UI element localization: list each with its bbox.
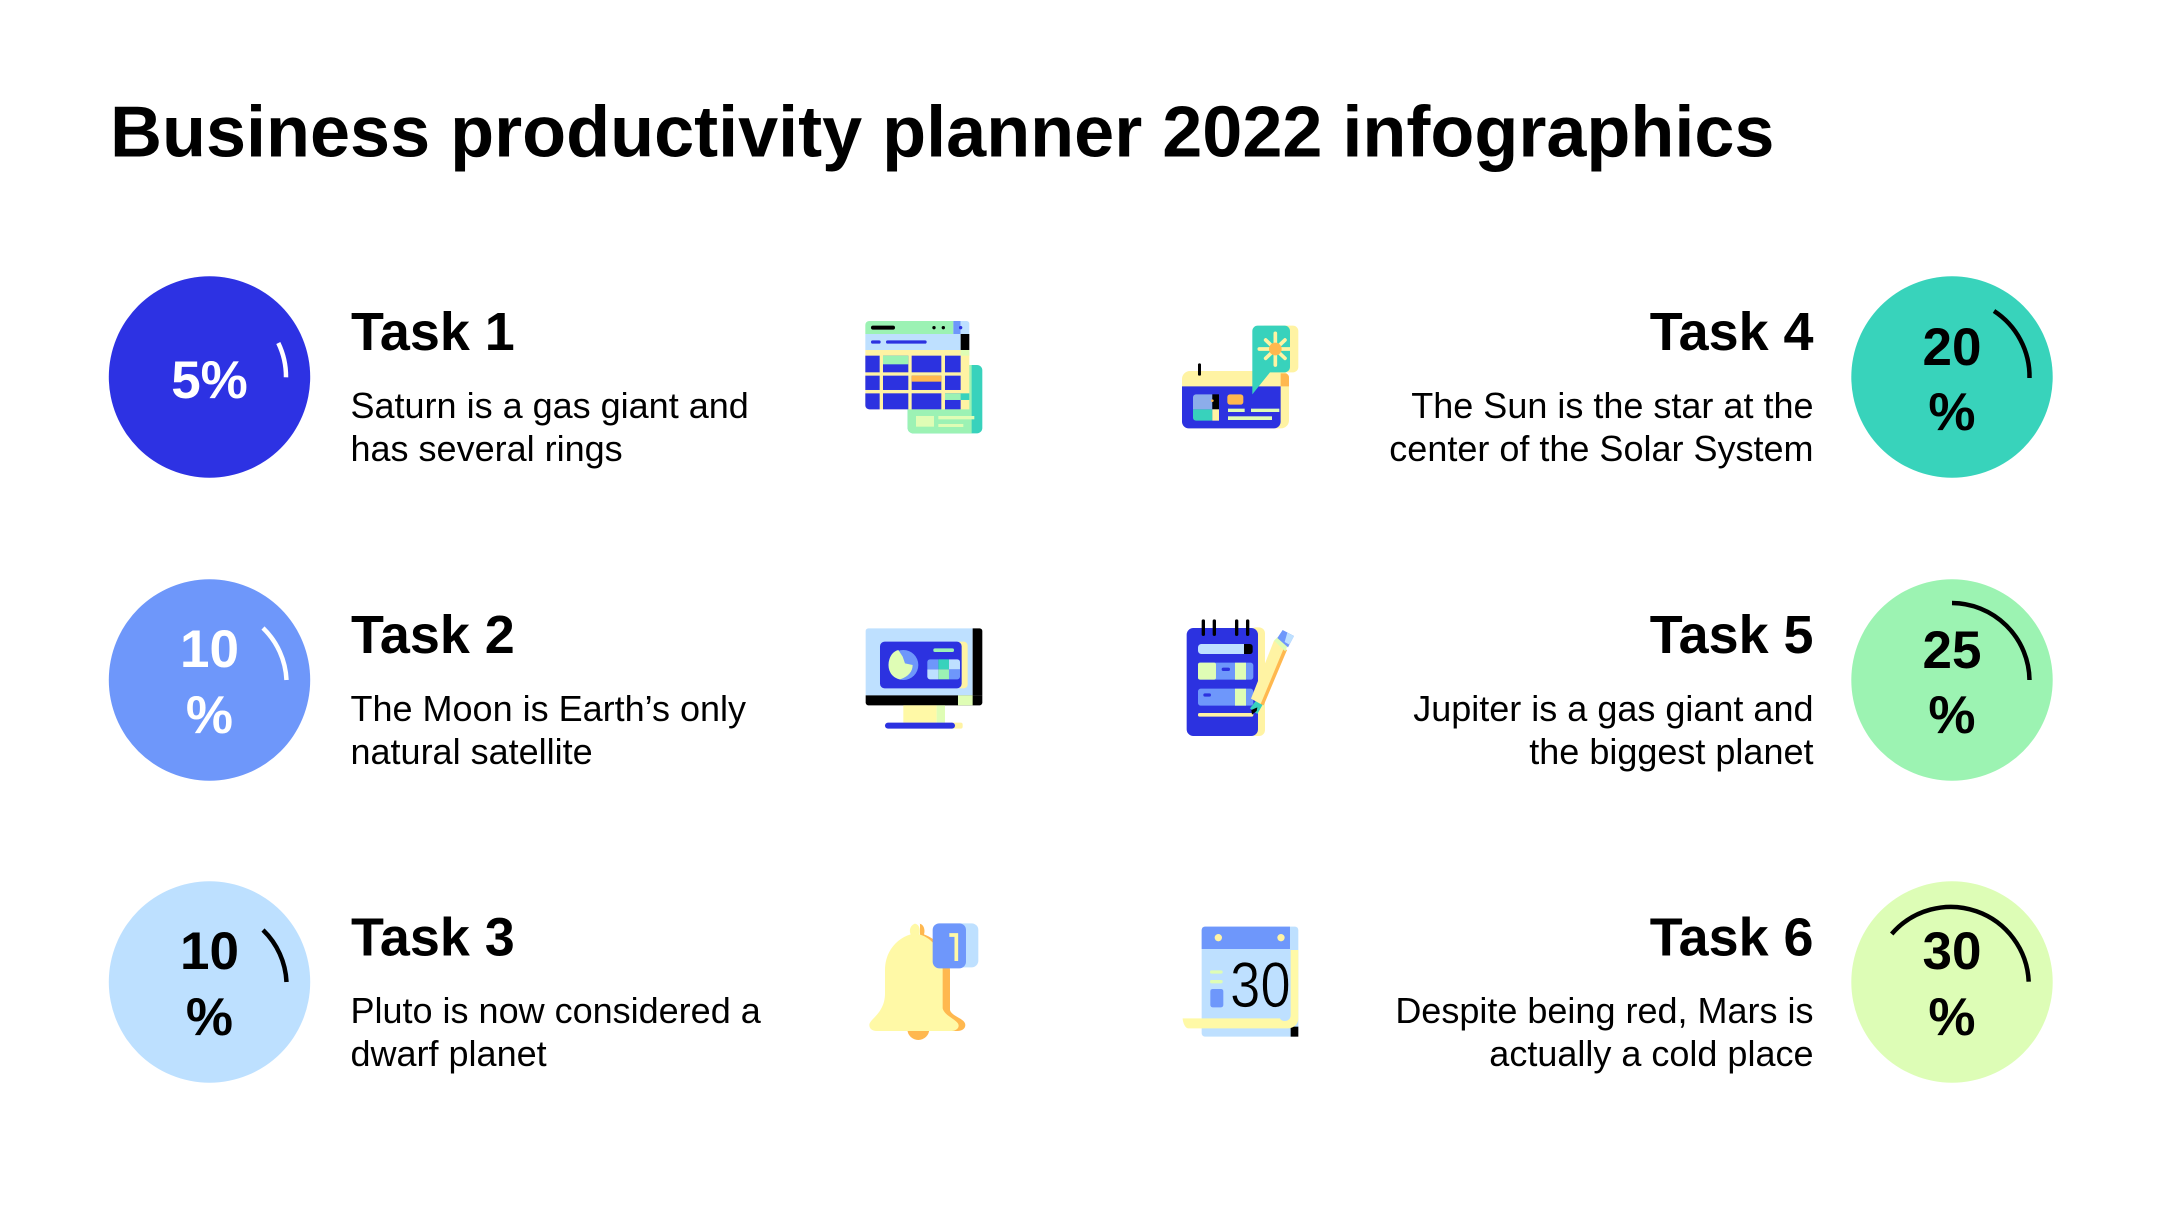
progress circle: 30%: 30 xyxy=(1923,922,1981,981)
icon: planner window xyxy=(865,321,982,433)
title: Business productivity planner 2022 infographics xyxy=(110,92,1774,172)
task 2 description: natural satellite xyxy=(350,731,593,772)
task 2 description: The Moon is Earth’s only xyxy=(350,688,746,729)
task 5 description: Jupiter is a gas giant and xyxy=(1413,688,1814,729)
progress circle: 25%: % xyxy=(1928,686,1976,745)
icon: desktop monitor xyxy=(866,628,982,729)
panel: task 6 xyxy=(1183,881,2053,1083)
progress circle: 25% xyxy=(1851,579,2053,781)
task 4 heading: Task 4 xyxy=(1650,302,1814,362)
progress circle: 10%: % xyxy=(186,988,233,1047)
task 1 description: Saturn is a gas giant and xyxy=(350,385,749,426)
progress circle: 10%: 10 xyxy=(180,620,239,679)
panel: task 5 xyxy=(1187,579,2053,781)
panel: task 1 xyxy=(109,276,982,478)
progress circle: 20%: 20 xyxy=(1923,318,1981,377)
icon: notification bell xyxy=(869,923,978,1040)
task 6 description: actually a cold place xyxy=(1489,1033,1814,1074)
task 3 description: dwarf planet xyxy=(350,1033,547,1074)
progress circle: 10%: 10 xyxy=(180,922,239,981)
task 4 description: The Sun is the star at the xyxy=(1411,385,1814,426)
task 1 description: has several rings xyxy=(350,428,623,469)
progress circle: 10% xyxy=(109,881,310,1083)
task 4 description: center of the Solar System xyxy=(1389,428,1814,469)
panel: task 4 xyxy=(1182,276,2053,478)
panel: task 3 xyxy=(109,881,978,1083)
progress circle: 25%: 25 xyxy=(1923,621,1981,680)
panel: task 2 xyxy=(109,579,982,781)
task 6 description: Despite being red, Mars is xyxy=(1395,990,1814,1031)
task 5 heading: Task 5 xyxy=(1650,605,1814,665)
progress circle: 5%: 5% xyxy=(171,351,248,410)
icon: wall calendar showing 30: 30 xyxy=(1230,949,1291,1021)
icon: notepad and pencil xyxy=(1187,619,1294,736)
task 6 heading: Task 6 xyxy=(1650,908,1814,968)
progress circle: 20% xyxy=(1851,276,2053,478)
task 3 heading: Task 3 xyxy=(351,908,515,968)
progress circle: 5% xyxy=(109,276,310,478)
task 1 heading: Task 1 xyxy=(351,302,515,362)
progress circle: 30% xyxy=(1851,881,2053,1083)
task 5 description: the biggest planet xyxy=(1529,731,1814,772)
task 2 heading: Task 2 xyxy=(351,605,515,665)
progress circle: 30%: % xyxy=(1928,988,1976,1047)
task 3 description: Pluto is now considered a xyxy=(350,990,762,1031)
icon: wall calendar showing 30 xyxy=(1183,927,1298,1037)
progress circle: 10% xyxy=(109,579,310,781)
icon: calendar card with sun bubble xyxy=(1182,326,1298,428)
progress circle: 10%: % xyxy=(186,686,233,745)
progress circle: 20%: % xyxy=(1928,383,1976,442)
